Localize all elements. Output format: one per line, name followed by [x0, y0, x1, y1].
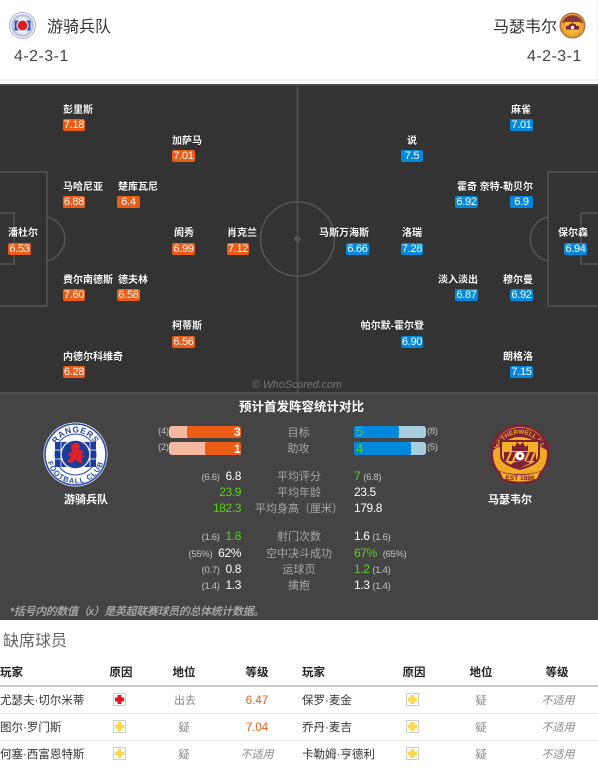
player: 淡入淡出: 淡入淡出: [438, 275, 478, 286]
player: 穆尔曼: [503, 274, 533, 301]
panel: missing players: [0, 620, 598, 780]
table row 3: 疑: [476, 749, 486, 761]
player: 保尔森: 6.94: [565, 243, 586, 255]
table row 3: 不适用: [542, 749, 574, 761]
table row 2: 7.04: [246, 722, 268, 734]
player: 潘杜尔: 6.53: [9, 243, 30, 255]
player: 潘杜尔: [8, 226, 38, 255]
player: 朗格洛: [503, 350, 533, 378]
stat row: aerial duels: [188, 546, 407, 560]
stat row: aerial duels: 空中决斗成功: [266, 548, 332, 560]
icon: yellow doubtful cross: [113, 720, 126, 733]
player: 加萨马: 7.01: [173, 150, 194, 162]
table header: 原因: [110, 667, 132, 679]
player: 楚库瓦尼: 6.4: [121, 196, 136, 208]
table row 2: 不适用: [542, 722, 574, 734]
stat row: dribbles: [202, 562, 390, 576]
table row 2: 乔丹·麦吉: [302, 722, 352, 734]
crest: Rangers: FOOTBALL CLUB: [48, 460, 103, 484]
team name: Motherwell: 马瑟韦尔: [493, 19, 557, 36]
player: 肖克兰: [227, 226, 257, 255]
player: 柯蒂斯: 6.56: [173, 336, 194, 348]
stat row: goals: 5: [356, 424, 363, 439]
table header: 地位: [172, 667, 196, 679]
heading: 缺席球员: [3, 633, 67, 650]
player: 阂秀: [172, 226, 195, 255]
stat row: average age: 23.9: [219, 485, 241, 499]
player: 肖克兰: 肖克兰: [227, 228, 257, 239]
player: 楚库瓦尼: [117, 180, 158, 208]
panel: lineup stats comparison: (8): [427, 426, 438, 437]
icon: yellow doubtful cross: [113, 747, 126, 760]
table row 3: [0, 747, 576, 761]
player: 奈特-勒贝尔: 奈特-勒贝尔: [480, 182, 533, 193]
stat row: shots: (1.6) 1.8: [202, 529, 241, 543]
player: 穆尔曼: 穆尔曼: [503, 275, 533, 286]
stat row: assists: 4: [356, 441, 363, 456]
stat row: goals: 目标: [288, 427, 310, 439]
player: 麻雀: 麻雀: [511, 105, 531, 116]
stat row: tackles: [202, 578, 390, 592]
table header: 玩家: [302, 667, 325, 679]
table header: 等级: [546, 667, 568, 679]
crest: Motherwell: EST 1886: [506, 475, 535, 482]
player: 奈特-勒贝尔: [480, 181, 533, 208]
stat row: average height: 平均身高（厘米）: [255, 503, 343, 515]
player: 霍奇: 霍奇: [457, 182, 477, 193]
player: 费尔南德斯: [63, 274, 113, 301]
table row 3: 何塞·西富恩特斯: [0, 749, 84, 761]
player: 帕尔默-霍尔登: [360, 320, 424, 348]
stat row: average age: [219, 485, 376, 499]
stat row: tackles: 擒抱: [288, 580, 310, 592]
player: 霍奇: 6.92: [456, 196, 477, 208]
table row 1: 6.47: [246, 695, 268, 707]
table header: 地位: [470, 667, 492, 679]
player: 彭里斯: [63, 104, 93, 131]
table header: [0, 665, 598, 687]
stat row: aerial duels: (55%) 62%: [188, 546, 241, 560]
table row 1: 保罗·麦金: [302, 695, 352, 707]
stat row: average rating: 平均评分: [277, 471, 321, 483]
player: 肖克兰: 7.12: [228, 243, 248, 255]
pitch markings: [0, 84, 598, 394]
player: 马斯万海斯: [319, 226, 369, 255]
player: 麻雀: 7.01: [511, 119, 532, 131]
player: 朗格洛: 朗格洛: [503, 352, 533, 363]
formation: Motherwell: 4-2-3-1: [527, 48, 582, 65]
table row 1: 疑: [476, 695, 486, 707]
player: 洛瑞: 7.28: [402, 243, 422, 255]
stat row: dribbles: 1.2 (1.4): [354, 562, 390, 576]
player: 阂秀: 阂秀: [174, 228, 194, 239]
stat row: average rating: [202, 469, 381, 483]
player: 马哈尼亚: 6.88: [64, 196, 84, 208]
player: 德夫林: [117, 274, 148, 301]
player: 穆尔曼: 6.92: [511, 289, 532, 301]
crest: Motherwell: [488, 424, 552, 484]
player: 彭里斯: 7.18: [64, 119, 84, 131]
footnote: *括号内的数值（x）是英超联赛球员的总体统计数据。: [10, 606, 264, 618]
team label: Motherwell: 马瑟韦尔: [488, 494, 532, 506]
team name: Rangers: 游骑兵队: [47, 19, 111, 36]
table row 2: 图尔·罗门斯: [0, 722, 61, 734]
player: 内德尔科维奇: 内德尔科维奇: [63, 352, 123, 363]
player: 柯蒂斯: [172, 320, 202, 348]
icon: yellow doubtful cross: [406, 747, 419, 760]
stat row: shots: 射门次数: [277, 531, 321, 543]
player: 奈特-勒贝尔: 6.9: [514, 196, 529, 208]
player: 朗格洛: 7.15: [511, 366, 532, 378]
panel: lineup stats comparison: [0, 394, 598, 620]
crest: Rangers: [44, 422, 108, 486]
stat row: assists: (2): [158, 442, 169, 453]
player: 马斯万海斯: 6.66: [347, 243, 368, 255]
table row 2: 疑: [178, 722, 190, 734]
heading: 预计首发阵容统计对比: [239, 400, 364, 414]
stat row: average rating: (6.6) 6.8: [202, 469, 241, 483]
player: 加萨马: 加萨马: [172, 136, 202, 147]
icon: yellow doubtful cross: [406, 693, 419, 706]
table row 3: 不适用: [240, 749, 274, 761]
team label: Rangers: 游骑兵队: [64, 494, 108, 506]
stat row: average rating: 7 (6.8): [354, 469, 381, 483]
player: 帕尔默-霍尔登: 6.90: [402, 336, 422, 348]
table row 2: [0, 720, 576, 734]
table row 1: 不适用: [542, 695, 574, 707]
stat row: average age: 平均年龄: [277, 487, 321, 499]
player: 内德尔科维奇: [63, 350, 123, 378]
player: 保尔森: [558, 226, 588, 255]
crest: Motherwell: MOTHERWELL F.C.: [494, 429, 544, 449]
stat row: dribbles: (0.7) 0.8: [202, 562, 241, 576]
table header: 等级: [246, 667, 268, 679]
stat row: assists: 1: [234, 442, 241, 456]
player: 马斯万海斯: 马斯万海斯: [319, 228, 369, 239]
panel: match header: [0, 0, 598, 84]
icon: red injury cross: [113, 693, 126, 706]
crest: Rangers: RANGERS: [52, 426, 98, 442]
panel: pitch: [0, 84, 598, 394]
player: 德夫林: 6.58: [118, 289, 139, 301]
player: 洛瑞: [401, 226, 423, 255]
icon: Motherwell small crest: [560, 12, 586, 38]
player: 潘杜尔: 潘杜尔: [8, 228, 38, 239]
player: 霍奇: [455, 180, 478, 208]
stat row: average height: [213, 501, 382, 515]
table header: 玩家: [0, 667, 23, 679]
table row 3: 疑: [178, 749, 190, 761]
player: 淡入淡出: [438, 274, 478, 301]
player: 阂秀: 6.99: [173, 243, 194, 255]
stat row: goals: 3: [234, 425, 241, 439]
player: 洛瑞: 洛瑞: [402, 228, 422, 239]
stat row: shots: 1.6 (1.6): [354, 529, 390, 543]
formation: Rangers: 4-2-3-1: [14, 48, 69, 65]
player: 楚库瓦尼: 楚库瓦尼: [118, 182, 158, 193]
player: 马哈尼亚: 马哈尼亚: [63, 182, 103, 193]
stat row: dribbles: 运球页: [282, 564, 316, 576]
player: 费尔南德斯: 7.60: [64, 289, 84, 301]
player: 德夫林: 德夫林: [118, 275, 148, 286]
table header: 原因: [402, 667, 426, 679]
stat row: goals: (4): [158, 426, 169, 437]
stat row: assists: [158, 441, 438, 456]
stat row: tackles: (1.4) 1.3: [202, 578, 241, 592]
stat row: assists: 助攻: [288, 443, 310, 455]
stat row: shots: [202, 529, 390, 543]
player: 麻雀: [510, 104, 533, 131]
table row 1: 尤瑟夫·切尔米蒂: [0, 695, 84, 707]
player: 说: 7.5: [405, 150, 419, 162]
player: 帕尔默-霍尔登: 帕尔默-霍尔登: [361, 321, 424, 332]
player: 柯蒂斯: 柯蒂斯: [172, 321, 202, 332]
player: 马哈尼亚: [63, 181, 103, 208]
player: 彭里斯: 彭里斯: [63, 105, 93, 116]
player: 说: 说: [407, 136, 417, 147]
stat row: goals: [158, 424, 438, 439]
player: 加萨马: [172, 134, 202, 162]
icon: yellow doubtful cross: [406, 720, 419, 733]
player: 费尔南德斯: 费尔南德斯: [63, 275, 113, 286]
stat row: aerial duels: 67% (65%): [354, 546, 407, 560]
table row 1: [0, 693, 576, 707]
stat row: average age: 23.5: [354, 485, 376, 499]
table row 1: 出去: [174, 695, 196, 707]
stat row: average height: 182.3: [213, 501, 241, 515]
player: 保尔森: 保尔森: [558, 228, 588, 239]
player: 淡入淡出: 6.87: [456, 289, 477, 301]
icon: Rangers small crest: [9, 12, 36, 39]
player: 内德尔科维奇: 6.28: [64, 366, 84, 378]
player: 说: [401, 135, 423, 162]
stat row: average height: 179.8: [354, 501, 382, 515]
watermark: © WhoScored.com: [252, 379, 342, 391]
table row 2: 疑: [476, 722, 486, 734]
panel: lineup stats comparison: (5): [427, 442, 438, 453]
stat row: tackles: 1.3 (1.4): [354, 578, 390, 592]
table row 3: 卡勒姆·亨德利: [302, 749, 375, 761]
